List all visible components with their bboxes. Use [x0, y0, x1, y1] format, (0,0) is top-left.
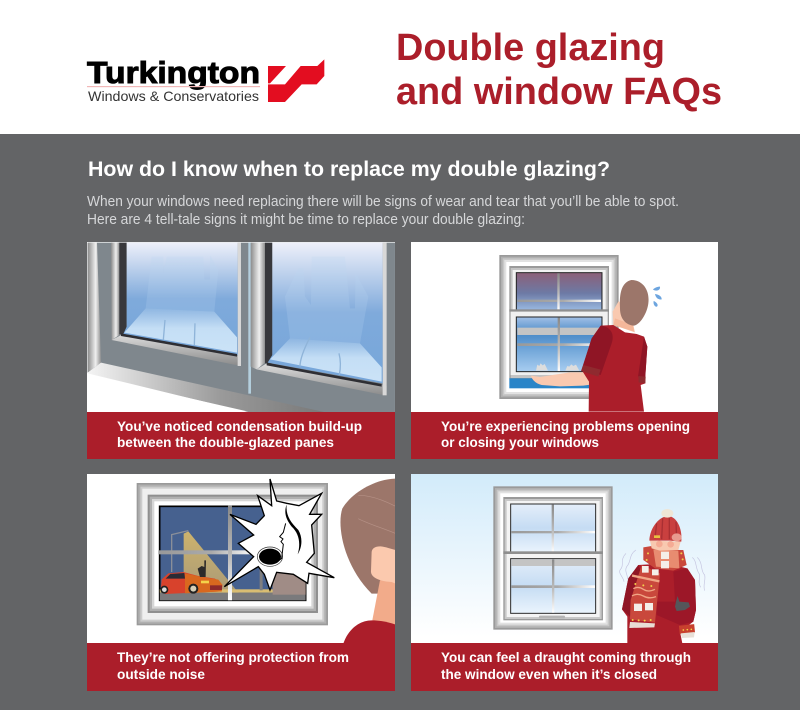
logo: Turkington Windows & Conservatories: Windows & Conservatories	[88, 88, 259, 104]
caption band: or closing your windows	[441, 435, 599, 450]
logo: Turkington Windows & Conservatories	[87, 56, 324, 104]
car	[161, 572, 222, 594]
intro text	[87, 194, 679, 228]
title: Double glazing	[396, 27, 665, 69]
right pane	[251, 243, 265, 369]
left pane	[111, 243, 119, 340]
title: and window FAQs	[396, 71, 722, 113]
caption band: the window even when it’s closed	[441, 667, 657, 682]
panel: draught	[411, 474, 718, 691]
shiver lines	[620, 550, 705, 591]
caption band	[87, 643, 395, 691]
mullion	[248, 243, 251, 394]
hat	[649, 516, 682, 542]
scarf tail	[630, 565, 660, 623]
illustration: person in hat and scarf	[620, 509, 705, 645]
sweat drops	[653, 287, 662, 307]
panel: condensation	[87, 242, 395, 459]
cuff	[679, 624, 695, 634]
intro text: When your windows need replacing there will be signs of wear and tear that you’ll be able to spot.	[87, 194, 679, 210]
caption band: They’re not offering protection from	[117, 650, 349, 665]
illustration: worried person at the window	[531, 280, 662, 412]
caption band	[411, 412, 718, 459]
heading: How do I know when to replace my double glazing?	[88, 158, 610, 181]
face	[650, 541, 681, 551]
caption band: between the double-glazed panes	[117, 435, 334, 450]
illustration: two condensation windows	[88, 243, 395, 415]
illustration: window with night street	[137, 483, 328, 625]
panel: problems opening or closing	[411, 242, 718, 459]
illustration: woman's head	[340, 479, 400, 647]
caption band: You can feel a draught coming through	[441, 650, 691, 665]
arm	[531, 372, 600, 386]
intro text: Here are 4 tell-tale signs it might be time to replace your double glazing:	[87, 212, 525, 228]
caption band	[411, 643, 718, 691]
logo: Turkington Windows & Conservatories: Turkington	[87, 56, 260, 90]
caption band: You’ve noticed condensation build-up	[117, 419, 362, 434]
body	[582, 325, 647, 412]
title	[396, 27, 722, 113]
head	[620, 280, 649, 326]
caption band	[87, 412, 395, 459]
coat	[622, 563, 696, 645]
illustration: sash window, cold	[493, 486, 613, 630]
panel: outside noise	[87, 474, 400, 691]
caption band: outside noise	[117, 667, 205, 682]
icon: logo mark	[268, 59, 324, 102]
icon: noise burst with sound symbol	[224, 479, 334, 590]
glove	[675, 596, 690, 611]
scarf neck	[643, 546, 687, 571]
caption band: You’re experiencing problems opening	[441, 419, 690, 434]
illustration: sash window	[499, 255, 619, 399]
